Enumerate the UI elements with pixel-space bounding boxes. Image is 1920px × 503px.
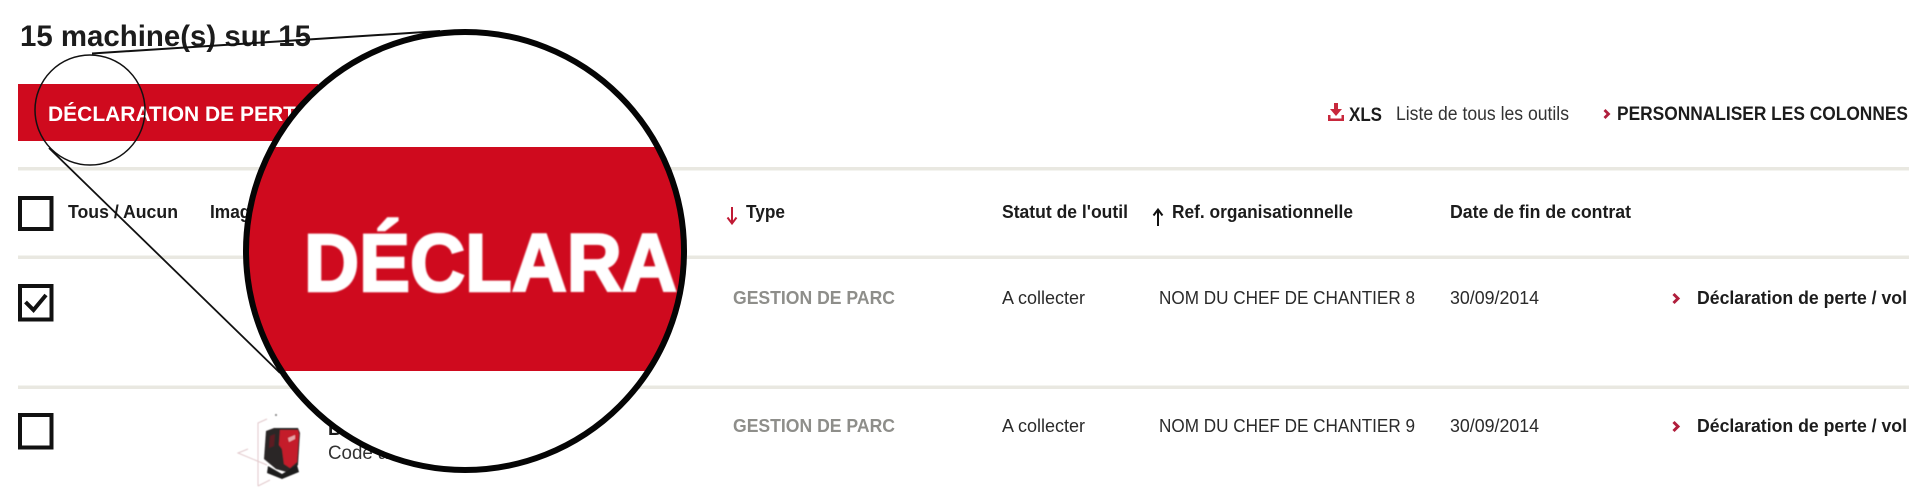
product image: laser tool — [238, 414, 300, 486]
chevron — [1674, 294, 1678, 303]
type: GESTION DE PARC — [733, 415, 895, 436]
tool name, partly hidden: B — [328, 419, 342, 440]
header: date: Date de fin de contrat — [1450, 201, 1631, 222]
action link: Déclaration de perte / vol — [1697, 288, 1907, 308]
magnifier connector lines — [49, 31, 440, 373]
header: tous / aucun: Tous / Aucun — [68, 201, 178, 222]
checked checkbox with tick — [20, 286, 52, 320]
magnified text: DÉCLARA — [304, 218, 677, 309]
magnified red button — [240, 147, 690, 371]
button: déclaration de perte — [18, 84, 318, 141]
magnifier lens — [240, 32, 690, 470]
icon: sort down arrow — [728, 207, 736, 224]
XLS link: XLS — [1349, 105, 1382, 126]
row 2 — [20, 414, 1907, 486]
header: image: Image — [210, 201, 260, 222]
header: statut: Statut de l'outil — [1002, 201, 1128, 222]
status: A collecter — [1002, 287, 1085, 308]
icon: XLS download — [1328, 103, 1344, 121]
date: 30/09/2014 — [1450, 415, 1539, 436]
ref: NOM DU CHEF DE CHANTIER 8 — [1159, 287, 1415, 308]
export description: Liste de tous les outils — [1396, 104, 1569, 125]
header: ref: Ref. organisationnelle — [1172, 201, 1353, 222]
title: 15 machine(s) sur 15 — [20, 20, 311, 53]
ref: NOM DU CHEF DE CHANTIER 9 — [1159, 415, 1415, 436]
header checkbox — [20, 198, 52, 229]
empty checkbox — [20, 415, 52, 448]
table header — [20, 198, 1631, 229]
header: type: Type — [746, 201, 785, 222]
row 1 — [20, 286, 1907, 320]
action link: Déclaration de perte / vol — [1697, 416, 1907, 436]
date: 30/09/2014 — [1450, 287, 1539, 308]
chevron — [1674, 422, 1678, 431]
button: déclaration de perte: DÉCLARATION DE PERTE — [48, 103, 310, 126]
magnifier small circle — [35, 55, 145, 165]
status: A collecter — [1002, 415, 1085, 436]
tool code, partly hidden: Code article — [328, 443, 428, 464]
icon: sort up arrow — [1154, 210, 1162, 226]
type: GESTION DE PARC — [733, 287, 895, 308]
